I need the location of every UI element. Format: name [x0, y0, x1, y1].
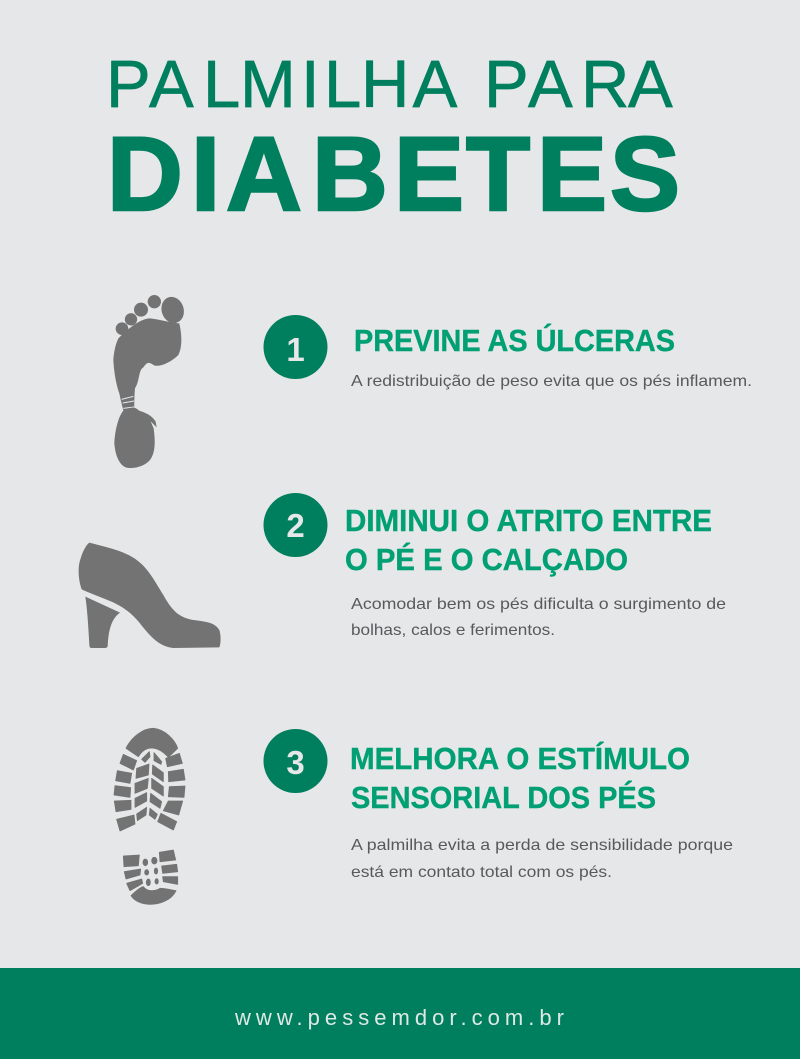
number badge 3: [264, 729, 328, 793]
description 2: Acomodar bem os pés dificulta o surgimento de: [351, 596, 726, 613]
number badge 1: 1: [286, 331, 305, 368]
heading 2: [345, 503, 712, 577]
number badge 1: [264, 315, 328, 379]
description 2: [351, 596, 726, 639]
number badge 2: [264, 493, 328, 557]
number badge 3: 3: [286, 744, 305, 781]
description 3: [351, 837, 733, 881]
icon: footprint: [113, 294, 187, 468]
icon: boot sole print: [114, 728, 185, 904]
description 3: A palmilha evita a perda de sensibilidade porque: [351, 837, 733, 854]
description 1: A redistribuição de peso evita que os pés inflamem.: [351, 373, 752, 390]
icon: high-heel shoe: [79, 543, 221, 648]
description 3: está em contato total com os pés.: [351, 864, 612, 881]
heading 2: O PÉ E O CALÇADO: [345, 542, 628, 577]
item 1: [264, 315, 752, 390]
heading 3: MELHORA O ESTÍMULO: [350, 741, 690, 776]
website address: www.pessemdor.com.br: [234, 1005, 564, 1030]
title line 1: PALMILHA PARA: [106, 47, 673, 122]
item 2: [264, 493, 726, 639]
number badge 2: 2: [286, 507, 305, 544]
description 2: bolhas, calos e ferimentos.: [351, 622, 555, 639]
title: [106, 47, 680, 233]
item 3: [264, 729, 733, 881]
heading 1: PREVINE AS ÚLCERAS: [354, 322, 675, 358]
footer band: [0, 968, 800, 1059]
heading 2: DIMINUI O ATRITO ENTRE: [345, 503, 712, 538]
heading 3: [350, 741, 690, 815]
heading 3: SENSORIAL DOS PÉS: [351, 780, 656, 815]
title line 2: DIABETES: [107, 116, 680, 233]
